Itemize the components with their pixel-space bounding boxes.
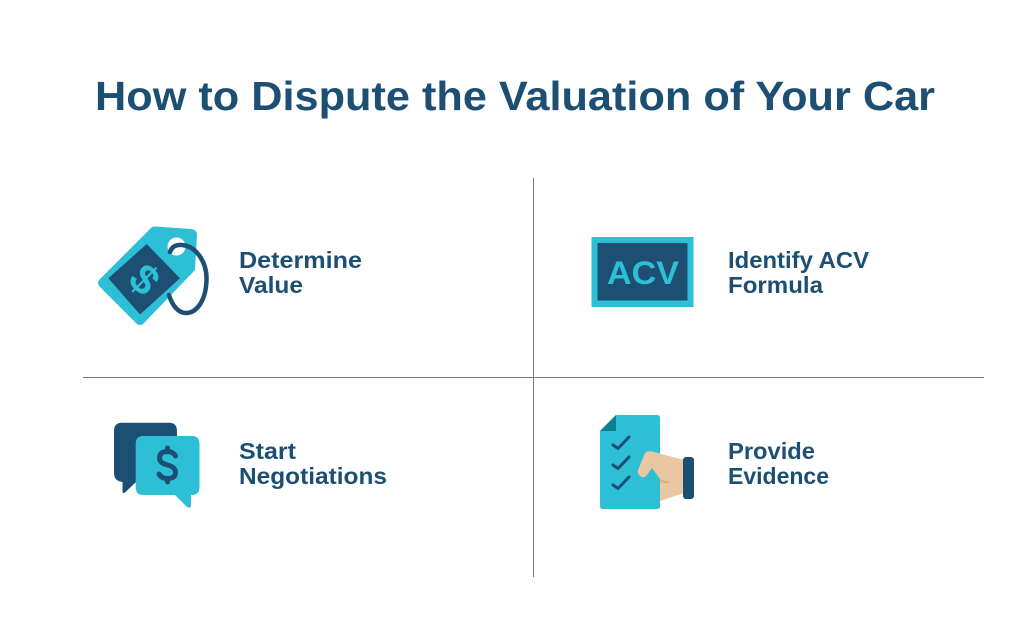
panel: determine value — [98, 226, 362, 325]
label: provide evidence: Provide — [728, 438, 815, 464]
label: identify ACV formula: Formula — [728, 272, 823, 298]
label: start negotiations: Negotiations — [239, 463, 387, 489]
label: start negotiations: Start — [239, 438, 296, 464]
title: How to Dispute the Valuation of Your Car — [95, 73, 935, 119]
panel: start negotiations — [114, 423, 387, 508]
panel: provide evidence — [600, 415, 829, 509]
label: determine value: Determine — [239, 247, 362, 273]
icon: ACV sign — [592, 237, 694, 307]
icon: document in hand — [600, 415, 694, 509]
panel: identify ACV formula — [592, 237, 870, 307]
label: provide evidence: Evidence — [728, 463, 829, 489]
icon: ACV sign: ACV — [607, 255, 680, 291]
label: determine value: Value — [239, 272, 303, 298]
label: identify ACV formula: Identify ACV — [728, 247, 870, 273]
icon: chat bubbles with dollar — [114, 423, 200, 508]
icon: price tag — [98, 226, 207, 325]
vertical divider — [533, 178, 534, 577]
horizontal divider — [83, 377, 984, 378]
icon: price tag: $ — [120, 254, 170, 304]
